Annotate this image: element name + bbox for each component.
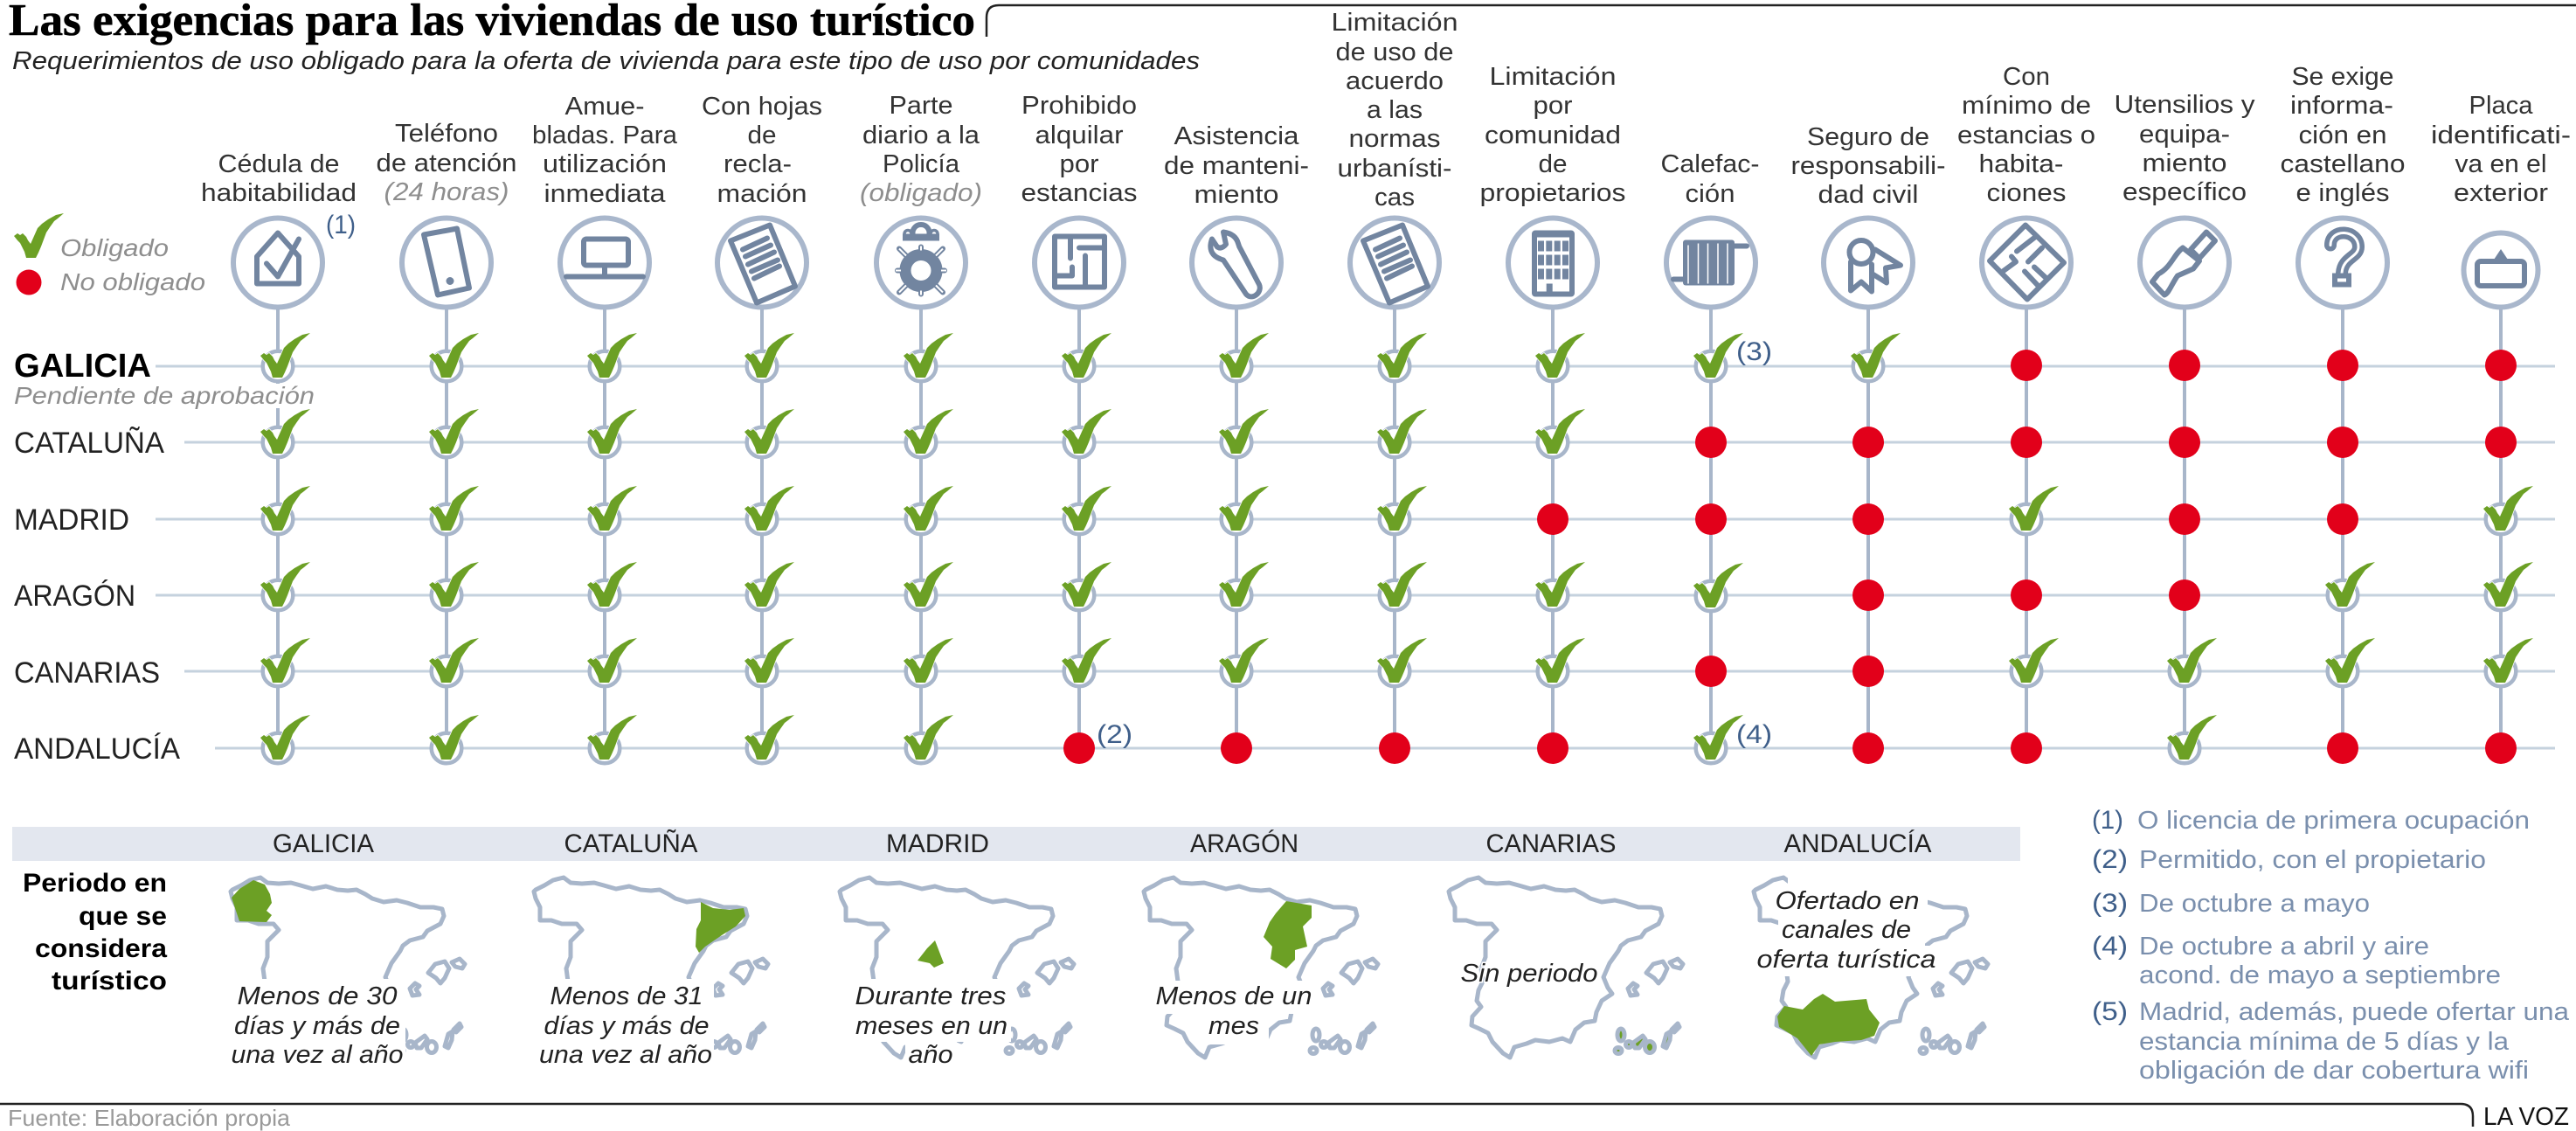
- column heading: Teléfono de atención: [376, 120, 517, 206]
- map: Aragón: mes: [1208, 1012, 1259, 1040]
- column heading: Placa identificativa en el exterior: va en el: [2455, 150, 2546, 178]
- icon: document urban rules: [1350, 219, 1439, 308]
- column heading: Parte diario a la Policía: (obligado): [860, 179, 982, 207]
- column heading: Limitación de uso urbanística: urbanísti-: [1337, 155, 1452, 183]
- column heading: Limitación por comunidad de propietarios: [1480, 63, 1625, 207]
- side heading: Periodo en que se considera turístico: considera: [35, 934, 167, 963]
- column heading: Utensilios y equipamiento específico: específico: [2122, 178, 2247, 206]
- side heading: Periodo en que se considera turístico: turístico: [52, 967, 167, 996]
- column heading: Utensilios y equipamiento específico: [2115, 91, 2255, 206]
- note marker (1): (1): [326, 211, 356, 239]
- legend: Obligado: [60, 234, 169, 261]
- footnotes: De octubre a abril y aire: [2139, 933, 2429, 961]
- top rule: [987, 5, 2576, 37]
- column heading: Placa identificativa en el exterior: exterior: [2454, 179, 2548, 207]
- source: Fuente: Elaboración propia: [8, 1105, 291, 1131]
- map: Aragón: Menos de un: [1155, 982, 1312, 1010]
- column heading: Seguro de responsabilidad civil: Seguro de: [1807, 123, 1929, 151]
- column heading: Parte diario a la Policía: [860, 92, 982, 207]
- bottom rule: [0, 1104, 2473, 1127]
- icon: building: [1508, 219, 1597, 308]
- map: Canarias: Sin periodo: [1461, 960, 1597, 988]
- column heading: Calefacción: ción: [1685, 180, 1735, 208]
- icon: document: [717, 219, 807, 308]
- column heading: Asistencia de mantenimiento: [1164, 122, 1309, 209]
- legend: [14, 213, 205, 295]
- map: Galicia: días y más de: [234, 1012, 400, 1040]
- side heading: Periodo en que se considera turístico: [23, 869, 167, 996]
- column heading: Limitación de uso urbanística: de uso de: [1335, 38, 1454, 66]
- column heading: Con hojas de reclamación: recla-: [724, 150, 792, 178]
- subtitle: Requerimientos de uso obligado para la oferta de vivienda para este tipo de uso por comunidades: [12, 47, 1200, 75]
- column heading: Placa identificativa en el exterior: identificati-: [2431, 121, 2571, 149]
- matrix grid lines: [156, 309, 2555, 748]
- column heading: Limitación de uso urbanística: acuerdo: [1346, 67, 1444, 95]
- column heading: Limitación de uso urbanística: a las: [1367, 96, 1423, 124]
- icon: house with check: [233, 219, 322, 308]
- column heading: Parte diario a la Policía: Policía: [883, 150, 960, 178]
- column heading: Limitación por comunidad de propietarios: propietarios: [1480, 179, 1625, 207]
- column heading: Placa identificativa en el exterior: [2431, 92, 2571, 207]
- footnotes: (1): [2092, 806, 2123, 835]
- icon: utensil: [2140, 219, 2229, 308]
- column heading: Limitación de uso urbanística: cas: [1375, 184, 1415, 212]
- icon: question mark: [2298, 219, 2387, 308]
- column heading: Teléfono de atención: (24 horas): [384, 178, 509, 206]
- map: Cataluña: [534, 878, 768, 1071]
- row: CATALUÑA: [14, 409, 2517, 460]
- row: GALICIA: GALICIA: [14, 348, 151, 385]
- map: Madrid: Durante tres: [855, 982, 1007, 1010]
- footnotes: (4): [2092, 932, 2128, 961]
- column heading: Amuebladas: utilización: [543, 150, 667, 178]
- column heading: Seguro de responsabilidad civil: dad civil: [1818, 181, 1919, 209]
- column heading: Con mínimo de estancias o habitaciones: ciones: [1987, 179, 2066, 207]
- column heading: Con mínimo de estancias o habitaciones: estancias o: [1957, 121, 2095, 149]
- column heading: Con mínimo de estancias o habitaciones: [1957, 63, 2095, 207]
- column heading: Asistencia de mantenimiento: miento: [1194, 181, 1279, 209]
- column heading: Con mínimo de estancias o habitaciones: Con: [2003, 63, 2050, 91]
- row: CANARIAS: CANARIAS: [14, 656, 160, 690]
- icon: radiator: [1666, 219, 1755, 308]
- map: Canarias: [1449, 878, 1683, 1058]
- region header band: CATALUÑA: [564, 829, 697, 858]
- column heading: Limitación por comunidad de propietarios: comunidad: [1485, 121, 1621, 149]
- map: Cataluña: Menos de 31: [551, 982, 703, 1010]
- column heading: Teléfono de atención: de atención: [376, 149, 517, 177]
- row: GALICIA: [12, 333, 2517, 409]
- row: ANDALUCÍA: (4): [1736, 720, 1772, 749]
- icon: phone: [402, 219, 491, 308]
- column heading: Con hojas de reclamación: Con hojas: [702, 93, 822, 121]
- row: CATALUÑA: CATALUÑA: [14, 427, 164, 460]
- column heading: Prohibido alquilar por estancias: [1021, 92, 1138, 207]
- footnotes: Permitido, con el propietario: [2139, 846, 2486, 874]
- column heading: Seguro de responsabilidad civil: [1791, 123, 1945, 209]
- map: Madrid: meses en un: [855, 1012, 1008, 1040]
- column heading: Limitación por comunidad de propietarios: Limitación: [1489, 63, 1617, 91]
- column heading: Seguro de responsabilidad civil: responsabili-: [1791, 152, 1945, 180]
- footnotes: acond. de mayo a septiembre: [2139, 961, 2501, 989]
- column heading: Con mínimo de estancias o habitaciones: mínimo de: [1962, 92, 2091, 120]
- icon: sign plate: [2464, 232, 2538, 308]
- column heading: Amuebladas: [532, 93, 678, 208]
- brand: La Voz: LA VOZ: [2483, 1103, 2569, 1131]
- column heading: Se exige información en castellano e inglés: [2281, 63, 2405, 207]
- footnotes: estancia mínima de 5 días y la: [2139, 1028, 2510, 1056]
- map: Cataluña: una vez al año: [539, 1041, 712, 1069]
- column heading: Amuebladas: inmediata: [544, 180, 666, 208]
- column heading: Prohibido alquilar por estancias: alquilar: [1035, 121, 1124, 149]
- column heading: Cédula de habitabilidad: habitabilidad: [201, 179, 357, 207]
- map: Aragón: [1144, 878, 1378, 1058]
- row: GALICIA: Pendiente de aprobación: [14, 382, 315, 409]
- row: MADRID: [14, 486, 2533, 537]
- footnotes: obligación de dar cobertura wifi: [2139, 1057, 2529, 1085]
- region header band: ANDALUCÍA: [1784, 829, 1931, 858]
- column heading: Utensilios y equipamiento específico: miento: [2143, 149, 2226, 177]
- icon: computer: [560, 219, 649, 308]
- column heading: Teléfono de atención: Teléfono: [395, 120, 498, 148]
- footnotes: [2092, 806, 2570, 1085]
- map: Andalucía: canales de: [1782, 916, 1911, 944]
- column heading: Calefacción: [1660, 150, 1760, 208]
- icon: floor plan: [1035, 219, 1124, 308]
- column heading: Utensilios y equipamiento específico: Utensilios y: [2115, 91, 2255, 119]
- icon: police badge: [876, 219, 966, 308]
- row: ANDALUCÍA: ANDALUCÍA: [14, 732, 180, 766]
- side heading: Periodo en que se considera turístico: Periodo en: [23, 869, 167, 898]
- footnotes: Madrid, además, puede ofertar una: [2139, 998, 2570, 1026]
- column heading: Con hojas de reclamación: de: [748, 121, 776, 149]
- column heading: Con hojas de reclamación: [702, 93, 822, 208]
- footnotes: O licencia de primera ocupación: [2137, 807, 2530, 835]
- icon: wrench: [1192, 219, 1281, 308]
- column heading: Asistencia de mantenimiento: de manteni-: [1164, 152, 1309, 180]
- column heading: Limitación de uso urbanística: normas: [1349, 125, 1440, 153]
- map: Andalucía: Ofertado en: [1776, 887, 1919, 915]
- column heading: Prohibido alquilar por estancias: por: [1059, 150, 1099, 178]
- column heading: Cédula de habitabilidad: Cédula de: [218, 150, 339, 178]
- row: CANARIAS: [14, 638, 2533, 690]
- map: Andalucía: oferta turística: [1756, 946, 1936, 974]
- row: ARAGÓN: [14, 562, 2533, 613]
- icon: diamond plan: [1982, 219, 2071, 308]
- column heading: Limitación de uso urbanística: [1332, 9, 1458, 212]
- column heading: Con mínimo de estancias o habitaciones: habita-: [1978, 150, 2064, 178]
- column heading: Placa identificativa en el exterior: Placa: [2469, 92, 2533, 120]
- region header band: MADRID: [886, 829, 989, 858]
- column heading: Prohibido alquilar por estancias: Prohibido: [1021, 92, 1137, 120]
- region header band: [12, 827, 2020, 861]
- column heading: Se exige información en castellano e inglés: informa-: [2290, 92, 2393, 120]
- footnotes: (5): [2092, 997, 2128, 1026]
- icon: ribbon: [1824, 219, 1913, 308]
- footnotes: (2): [2092, 845, 2128, 874]
- map: Andalucía: [1752, 874, 1988, 1058]
- column heading: Se exige información en castellano e inglés: ción en: [2298, 121, 2387, 149]
- side heading: Periodo en que se considera turístico: que se: [79, 902, 167, 931]
- map: Madrid: [840, 878, 1074, 1071]
- column heading: Limitación por comunidad de propietarios: por: [1533, 92, 1573, 120]
- region header band: GALICIA: [273, 829, 374, 858]
- map: Galicia: Menos de 30: [238, 982, 397, 1010]
- column heading: Limitación de uso urbanística: Limitación: [1332, 9, 1458, 37]
- footnotes: De octubre a mayo: [2139, 890, 2370, 918]
- row: ANDALUCÍA: [14, 715, 2517, 766]
- column heading: Se exige información en castellano e inglés: castellano: [2281, 150, 2405, 178]
- column heading: Limitación por comunidad de propietarios: de: [1538, 150, 1568, 178]
- column heading: Se exige información en castellano e inglés: e inglés: [2296, 179, 2389, 207]
- row: MADRID: MADRID: [14, 503, 129, 537]
- row: ARAGÓN: ARAGÓN: [14, 579, 135, 613]
- map: Cataluña: días y más de: [544, 1012, 710, 1040]
- legend: No obligado: [60, 268, 205, 295]
- map: Galicia: una vez al año: [231, 1041, 404, 1069]
- column heading: Se exige información en castellano e inglés: Se exige: [2291, 63, 2394, 91]
- column heading: Amuebladas: Amue-: [564, 93, 645, 121]
- footnotes: (3): [2092, 889, 2128, 918]
- row: GALICIA: (3): [1736, 337, 1772, 366]
- map: Galicia: [229, 878, 465, 1071]
- column heading: Prohibido alquilar por estancias: estancias: [1021, 179, 1138, 207]
- column heading: Asistencia de mantenimiento: Asistencia: [1174, 122, 1299, 150]
- column heading: Parte diario a la Policía: diario a la: [862, 121, 980, 149]
- column heading: Calefacción: Calefac-: [1660, 150, 1760, 178]
- region header band: ARAGÓN: [1190, 829, 1298, 858]
- region header band: CANARIAS: [1485, 829, 1617, 858]
- column heading: Amuebladas: bladas. Para: [532, 121, 678, 149]
- column heading: Parte diario a la Policía: Parte: [890, 92, 952, 120]
- column heading: Con hojas de reclamación: mación: [717, 180, 807, 208]
- row: ANDALUCÍA: (2): [1097, 720, 1132, 749]
- map: Madrid: año: [909, 1041, 952, 1069]
- column heading: Utensilios y equipamiento específico: equipa-: [2139, 121, 2230, 149]
- column heading: Cédula de habitabilidad: [201, 150, 357, 207]
